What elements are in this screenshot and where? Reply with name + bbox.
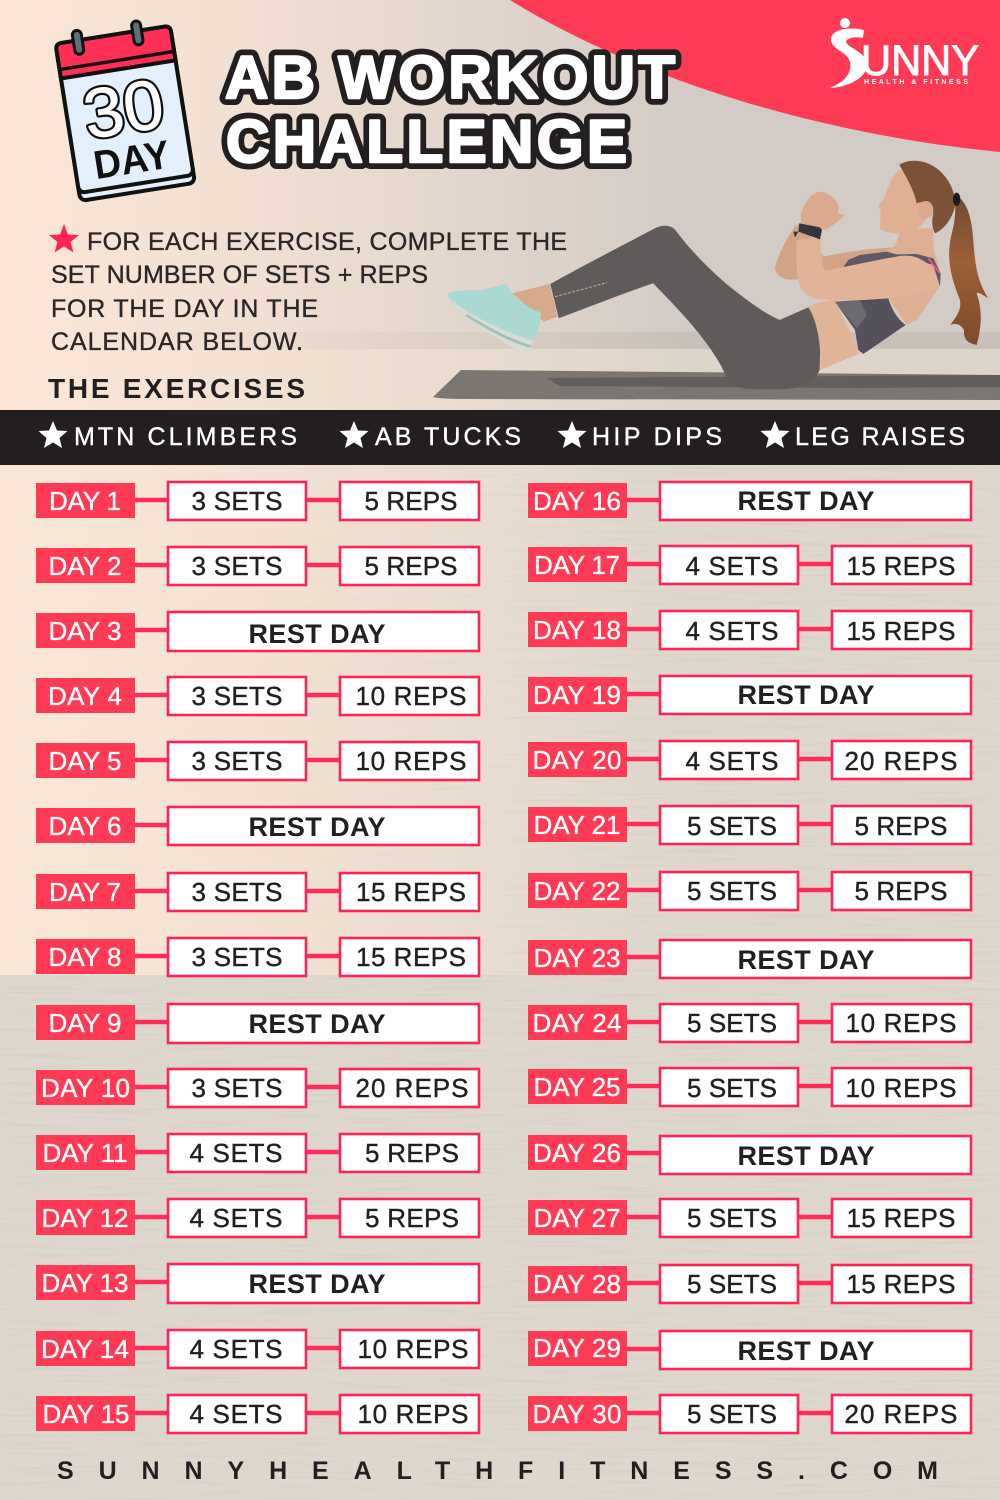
day 20: 4 SETS: [686, 746, 778, 776]
ponytail: [949, 195, 988, 345]
hair: [899, 161, 955, 233]
day 25: 10 REPS: [846, 1073, 956, 1103]
day 4: 10 REPS: [356, 681, 466, 711]
day 7: [36, 873, 479, 911]
day 8: 15 REPS: [356, 942, 466, 972]
day 24: [528, 1004, 971, 1042]
day 1: 5 REPS: [364, 486, 458, 516]
day 12: 4 SETS: [190, 1203, 282, 1233]
day 25: [528, 1068, 971, 1106]
day 30: 20 REPS: [844, 1399, 958, 1429]
day 11: 4 SETS: [190, 1138, 282, 1168]
day 5: DAY 5: [48, 746, 122, 776]
day 1: [36, 482, 479, 520]
day 30: DAY 30: [532, 1399, 622, 1429]
day 7: 15 REPS: [356, 877, 466, 907]
day 15: 4 SETS: [190, 1399, 282, 1429]
day 18: 4 SETS: [686, 616, 778, 646]
neck and back: [860, 228, 940, 325]
abdomen: [808, 300, 860, 370]
day 19 rest: DAY 19: [533, 680, 621, 710]
exercise: mtn climbers: MTN CLIMBERS: [74, 423, 297, 451]
icon: 30 day calendar: 30: [78, 64, 169, 154]
day 22: DAY 22: [534, 876, 620, 906]
day 15: [36, 1395, 479, 1433]
day 1: DAY 1: [49, 486, 121, 516]
day 21: 5 REPS: [854, 811, 948, 841]
day 29 rest: DAY 29: [533, 1333, 621, 1363]
day 9 rest: [36, 1004, 479, 1043]
day 14: DAY 14: [41, 1334, 129, 1364]
day 22: [528, 872, 971, 910]
day 7: 3 SETS: [192, 877, 282, 907]
day 3 rest: [36, 612, 479, 651]
day 10: [36, 1069, 479, 1107]
day 19 rest: REST DAY: [738, 680, 874, 710]
day 5: 10 REPS: [356, 746, 466, 776]
day 2: DAY 2: [48, 551, 122, 581]
hands: [801, 192, 845, 229]
day 26 rest: DAY 26: [533, 1138, 621, 1168]
legs and shorts: [448, 226, 820, 389]
day 28: 15 REPS: [846, 1269, 956, 1299]
yoga mat: [433, 370, 1000, 400]
day 4: DAY 4: [48, 681, 122, 711]
day 2: 5 REPS: [364, 551, 458, 581]
day 23 rest: DAY 23: [534, 943, 620, 973]
far arm: [775, 222, 893, 280]
day 24: DAY 24: [532, 1008, 622, 1038]
day 26 rest: [528, 1135, 971, 1174]
day 1: 3 SETS: [192, 486, 282, 516]
photo: woman doing crunch: [448, 161, 988, 389]
day 9 rest: REST DAY: [248, 1009, 386, 1039]
day 11: DAY 11: [42, 1138, 128, 1168]
day 11: 5 REPS: [365, 1138, 459, 1168]
red corner swoosh: [510, 0, 1000, 152]
day 2: 3 SETS: [192, 551, 282, 581]
day 21: [528, 806, 971, 844]
icon: star: [49, 224, 79, 252]
icon: 30 day calendar: 30: [78, 64, 169, 154]
day 14: 4 SETS: [190, 1334, 282, 1364]
day 14: [36, 1330, 479, 1368]
day 21: 5 SETS: [687, 811, 777, 841]
day 29 rest: [528, 1331, 971, 1369]
day 11: [36, 1134, 479, 1172]
day 18: [528, 611, 971, 649]
day 27: 5 SETS: [687, 1203, 777, 1233]
instructions text block: FOR EACH EXERCISE, COMPLETE THE: [87, 228, 567, 256]
day 5: [36, 742, 479, 780]
exercise: leg raises: LEG RAISES: [795, 423, 965, 451]
day 19 rest: [528, 676, 971, 714]
day 8: [36, 938, 479, 976]
face: [878, 170, 930, 233]
day 6 rest: [36, 807, 479, 845]
day 16 rest: [528, 482, 971, 520]
ear: [918, 201, 933, 219]
day 9 rest: DAY 9: [48, 1008, 122, 1038]
day 16 rest: REST DAY: [738, 486, 874, 516]
foot and shoe: [448, 284, 558, 354]
day 21: DAY 21: [534, 810, 620, 840]
scrunchie: [953, 193, 960, 206]
day 23 rest: [528, 940, 971, 978]
day 30: 5 SETS: [687, 1399, 777, 1429]
day 7: DAY 7: [49, 877, 121, 907]
day 20: DAY 20: [532, 745, 622, 775]
day 13 rest: [36, 1264, 479, 1303]
day 8: 3 SETS: [192, 942, 282, 972]
day 6 rest: DAY 6: [48, 811, 122, 841]
day 10: 3 SETS: [192, 1073, 282, 1103]
day 14: 10 REPS: [358, 1334, 468, 1364]
day 4: 3 SETS: [192, 681, 282, 711]
day 17: 4 SETS: [686, 551, 778, 581]
day 22: 5 REPS: [854, 876, 948, 906]
day 27: DAY 27: [534, 1203, 620, 1233]
heading: the exercises: THE EXERCISES: [48, 373, 305, 404]
day 4: [36, 677, 479, 715]
exercise: ab tucks: AB TUCKS: [375, 423, 521, 451]
logo: Sunny Health & Fitness: [829, 18, 979, 88]
day 20: [528, 741, 971, 779]
day 8: DAY 8: [48, 942, 122, 972]
logo: Sunny Health & Fitness: HEALTH & FITNESS: [864, 79, 968, 86]
day 26 rest: REST DAY: [738, 1141, 874, 1171]
day 3 rest: DAY 3: [48, 616, 122, 646]
day 15: 10 REPS: [358, 1399, 468, 1429]
day 12: [36, 1199, 479, 1237]
instructions text block: FOR THE DAY IN THE: [51, 295, 318, 323]
instructions text block: SET NUMBER OF SETS + REPS: [51, 261, 428, 289]
day 28: 5 SETS: [687, 1269, 777, 1299]
day 18: 15 REPS: [846, 616, 956, 646]
calendar column: days 16-30: [528, 482, 971, 1433]
day 6 rest: REST DAY: [248, 812, 386, 842]
day 30: [528, 1395, 971, 1433]
upper body: [775, 161, 988, 370]
day 24: 10 REPS: [846, 1008, 956, 1038]
title: AB WORKOUT: [225, 44, 675, 111]
near arm: [796, 237, 937, 300]
day 10: 20 REPS: [356, 1073, 468, 1103]
day 23 rest: REST DAY: [738, 945, 874, 975]
day 10: DAY 10: [41, 1073, 130, 1103]
logo: Sunny Health & Fitness: UNNY: [861, 37, 979, 85]
calendar column: days 1-15: [36, 482, 479, 1433]
logo figure: [829, 28, 867, 88]
footer website: SUNNYHEALTHFITNESS.COM: [57, 1457, 938, 1485]
day 28: DAY 28: [533, 1269, 621, 1299]
day 13 rest: DAY 13: [42, 1268, 128, 1298]
day 3 rest: REST DAY: [248, 619, 386, 649]
day 28: [528, 1265, 971, 1303]
icon: 30 day calendar: DAY: [91, 133, 173, 188]
exercises bar: [0, 410, 1000, 465]
day 22: 5 SETS: [687, 876, 777, 906]
watch: [793, 223, 822, 239]
day 27: 15 REPS: [846, 1203, 956, 1233]
title: CHALLENGE: [226, 108, 627, 175]
sports bra: [835, 252, 941, 354]
exercise: hip dips: HIP DIPS: [592, 423, 722, 451]
day 17: 15 REPS: [846, 551, 956, 581]
day 17: [528, 546, 971, 584]
title: AB WORKOUT: [225, 44, 675, 111]
day 13 rest: REST DAY: [248, 1269, 386, 1299]
day 25: 5 SETS: [687, 1073, 777, 1103]
day 17: DAY 17: [534, 550, 620, 580]
title: [225, 44, 675, 175]
day 12: 5 REPS: [365, 1203, 459, 1233]
title: CHALLENGE: [226, 108, 627, 175]
day 24: 5 SETS: [687, 1008, 777, 1038]
day 12: DAY 12: [42, 1203, 128, 1233]
icon: 30 day calendar: [54, 16, 195, 201]
day 29 rest: REST DAY: [738, 1336, 874, 1366]
instructions text block: CALENDAR BELOW.: [51, 328, 303, 356]
day 25: DAY 25: [534, 1072, 620, 1102]
day 16 rest: DAY 16: [533, 486, 621, 516]
day 5: 3 SETS: [192, 746, 282, 776]
day 2: [36, 547, 479, 585]
day 15: DAY 15: [42, 1399, 130, 1429]
instructions text block: [49, 224, 567, 356]
day 27: [528, 1199, 971, 1237]
day 18: DAY 18: [533, 615, 621, 645]
day 20: 20 REPS: [844, 746, 958, 776]
